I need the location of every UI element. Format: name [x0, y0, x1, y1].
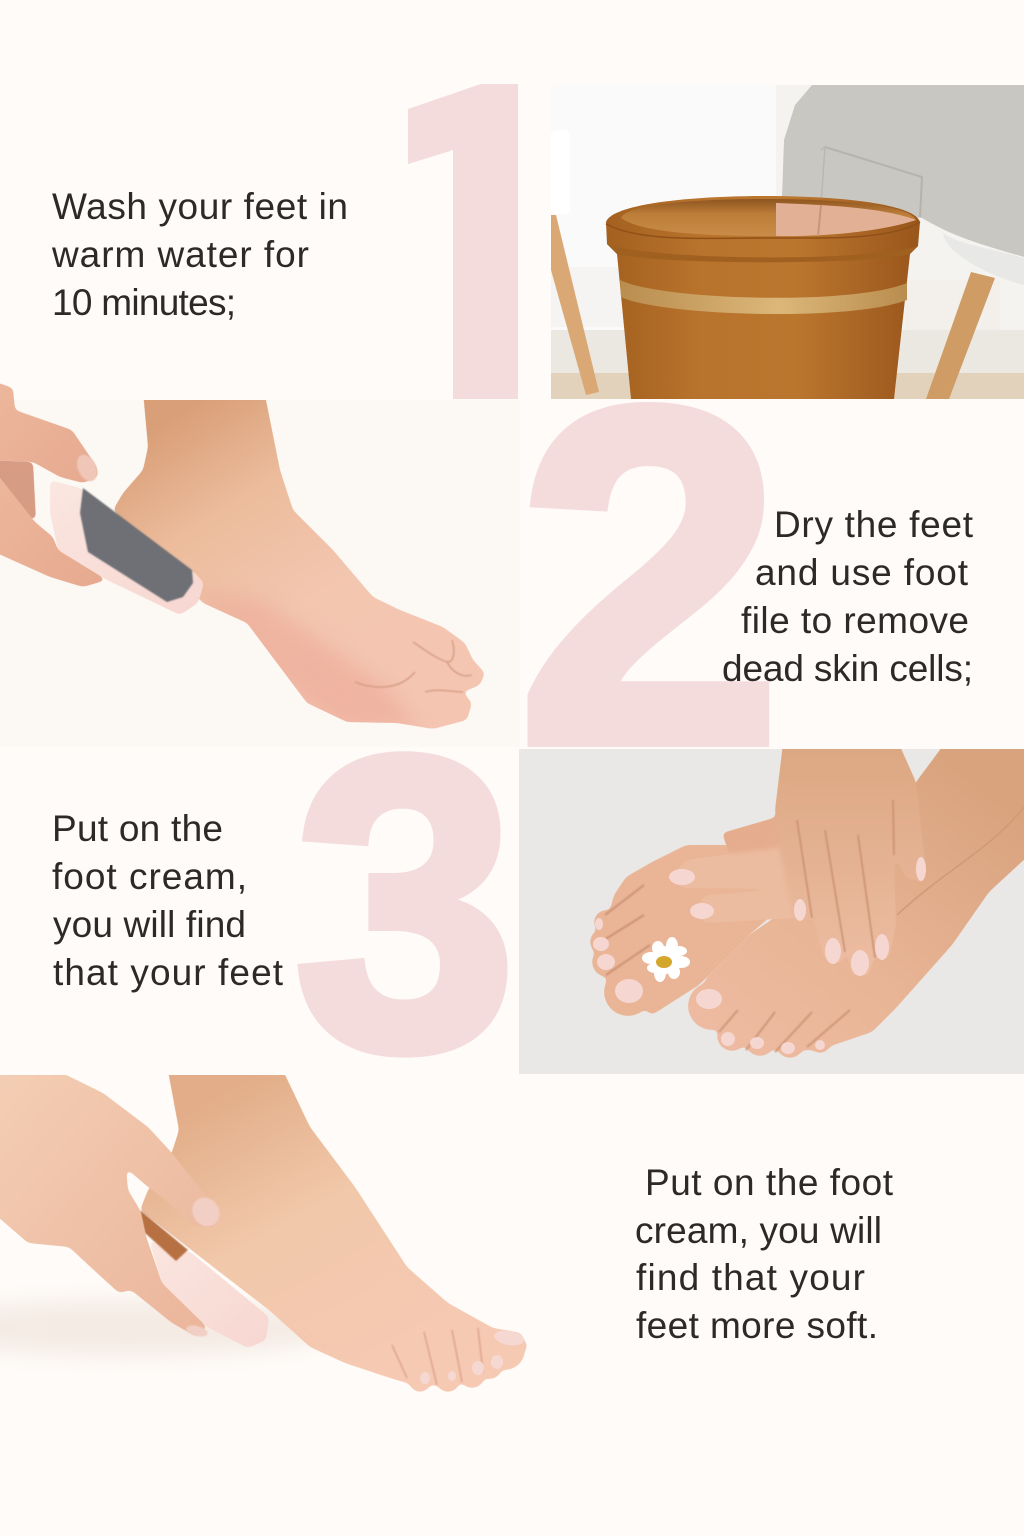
text: step 3: that your feet: [53, 952, 284, 993]
numeral 2: 2: [517, 310, 782, 843]
cream applicator: [140, 1210, 269, 1348]
daisy: [642, 937, 690, 982]
text: step 2: [722, 504, 974, 689]
text: step 2: Dry the feet: [774, 504, 974, 545]
text: step 3: [52, 808, 284, 993]
hand: [0, 1060, 225, 1339]
text: step 4: [635, 1162, 894, 1346]
text: step 1: warm water for: [51, 234, 309, 275]
photo: hands on feet with daisy: [519, 735, 1024, 1074]
text: step 1: [51, 186, 348, 323]
text: step 1: Wash your feet in: [52, 186, 348, 227]
text: step 2: dead skin cells;: [722, 648, 973, 689]
nails: [593, 857, 926, 1054]
text: step 2: file to remove: [741, 600, 969, 641]
foot: [113, 380, 485, 730]
text: step 4: cream, you will: [635, 1210, 882, 1251]
numeral 3: 3: [295, 673, 516, 1136]
foot file: [50, 480, 204, 615]
panel background: step 2 photo: [0, 400, 520, 747]
text: step 4: feet more soft.: [636, 1305, 878, 1346]
toenails: [420, 1329, 525, 1384]
numeral 1: 1: [362, 0, 617, 498]
text: step 3: you will find: [53, 904, 246, 945]
upper foot: [590, 844, 768, 1016]
hand: [671, 735, 926, 975]
text: step 4: find that your: [636, 1257, 865, 1298]
lower foot and legs: [688, 735, 1024, 1058]
photo: applying cream to heel: [0, 1075, 527, 1392]
text: step 2: and use foot: [755, 552, 969, 593]
photo: foot file on heel: [0, 380, 485, 730]
text: step 1: 10 minutes;: [52, 282, 236, 323]
photo: foot bath in wooden bucket: [551, 85, 1024, 399]
foot: [140, 1060, 528, 1392]
text: step 4: Put on the foot: [645, 1162, 894, 1203]
hand: [0, 380, 107, 587]
text: step 3: Put on the: [52, 808, 223, 849]
text: step 3: foot cream,: [52, 856, 247, 897]
